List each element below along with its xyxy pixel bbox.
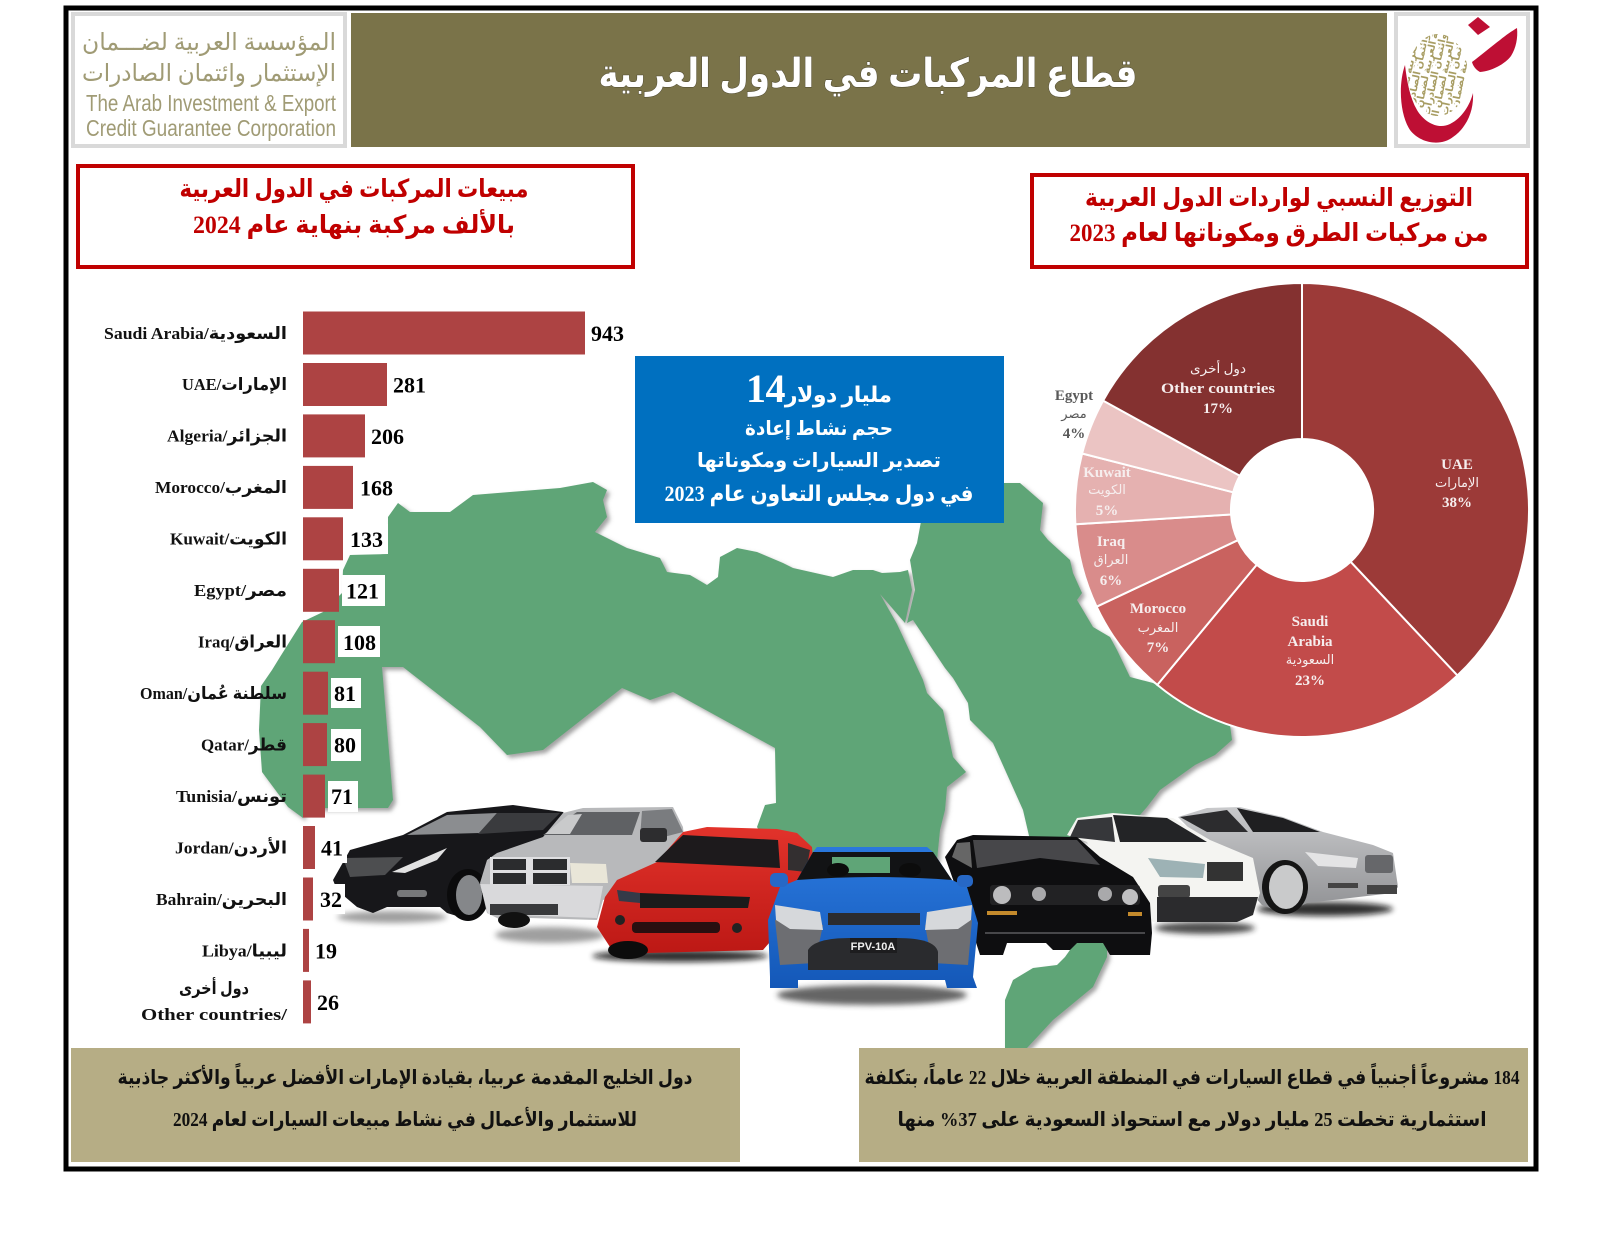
label: Egypt [1055,388,1093,442]
row: Kuwait: Kuwait/الكويت [170,530,287,550]
slice: Morocco 7% [1097,540,1257,685]
row: Morocco [155,466,393,509]
car: white SUV [1067,813,1260,934]
row: Egypt [194,569,385,612]
header: organisation logo panel: الإستثمار وائتمان الصادرات [82,61,336,87]
header: organisation logo panel: Credit Guarantee Corporation [86,115,336,141]
callout: re-export value: في دول مجلس التعاون عام 2023 [664,481,974,507]
row: Qatar: Qatar/قطر [201,736,287,756]
row: Oman: Oman/سلطنة عُمان [140,684,287,703]
label: Kuwait [1083,465,1131,519]
callout: re-export value: حجم نشاط إعادة [745,418,893,440]
label: Other countries: 17% [1203,401,1233,417]
heading: sales chart title box: بالألف مركبة بنهاية عام 2024 [193,209,515,240]
title banner: قطاع المركبات في الدول العربية [598,51,1138,97]
row: Oman: 81 [334,681,356,706]
label: Egypt: مصر [1060,406,1087,422]
row: Algeria [167,414,404,457]
row: Other countries: Other countries/ [141,1005,287,1024]
car: blue performance saloon: FPV-10A [851,941,895,953]
car: blue performance saloon [768,847,978,1005]
car: silver pickup truck [480,807,686,943]
text panel: Gulf lead: دول الخليج المقدمة عربيا، بقيادة الإمارات الأفضل عربياً والأكثر جاذبية [118,1063,692,1089]
slice: Kuwait 5% [1075,454,1233,524]
title banner [351,13,1387,147]
label: Other countries: دول أخرى [1190,360,1246,377]
header: organisation logo panel [73,14,345,146]
row: Libya: Libya/ليبيا [202,942,287,960]
label: Iraq: العراق [1094,552,1128,568]
label: Saudi Arabia: Saudi [1292,614,1328,630]
label: Iraq: 6% [1100,573,1122,589]
row: Other countries [141,977,339,1024]
row: Kuwait: 133 [350,527,383,552]
slice: Other countries 17% [1103,283,1302,476]
row: UAE [182,363,426,406]
label: UAE: الإمارات [1435,475,1479,491]
label: Saudi Arabia [1286,614,1334,689]
row: Jordan [175,826,347,869]
row: Qatar: 80 [334,732,356,758]
car: black sedan [333,805,575,923]
label: Saudi Arabia: Arabia [1288,634,1333,650]
label: Morocco [1130,601,1186,656]
donut chart: import shares [1075,283,1529,737]
row: Morocco: Morocco/المغرب [155,478,287,498]
row: Kuwait [170,517,388,560]
label: Egypt: Egypt [1055,388,1093,404]
label: Other countries: Other countries [1161,381,1275,397]
callout: re-export value: مليار دولار14 [746,366,892,411]
label: Iraq [1094,534,1128,589]
car: black muscle car [945,835,1152,955]
slice: Saudi Arabia 23% [1157,562,1457,737]
heading: sales chart title box: مبيعات المركبات في الدول العربية [180,176,528,204]
heading: imports chart title box: من مركبات الطرق ومكوناتها لعام 2023 [1070,220,1488,248]
row: Iraq: 108 [343,630,376,655]
label: Morocco: 7% [1147,640,1169,656]
row: Bahrain: Bahrain/البحرين [156,890,287,910]
bar chart: vehicle sales [104,312,624,1024]
text panel: foreign projects: 184 مشروعاً أجنبياً في قطاع السيارات في المنطقة العربية خلال 22 عاماً، بتكلفة [864,1063,1520,1090]
row: Oman [140,672,361,715]
label: UAE: UAE [1441,457,1473,473]
row: Libya [202,929,337,972]
label: Other countries [1161,360,1275,417]
label: Saudi Arabia: السعودية [1286,652,1334,668]
label: Morocco: Morocco [1130,601,1186,617]
text panel: Gulf lead: للاستثمار والأعمال في نشاط مبيعات السيارات لعام 2024 [173,1106,637,1132]
row: Morocco: 168 [360,476,393,500]
row: Other countries: 26 [317,990,339,1015]
row: Saudi Arabia: 943 [591,321,624,346]
label: Kuwait: 5% [1096,503,1118,519]
label: Morocco: المغرب [1138,620,1178,636]
label: UAE: 38% [1442,495,1472,511]
car: silver sports saloon [1178,807,1398,916]
row: Egypt: Egypt/مصر [194,581,287,601]
row: Jordan: Jordan/الأردن [175,838,287,858]
label: Iraq: Iraq [1097,534,1126,550]
row: Iraq: Iraq/العراق [198,632,287,652]
map of the Arab world [259,482,1232,1048]
row: Saudi Arabia [104,312,624,354]
label: Kuwait: Kuwait [1083,465,1131,481]
row: Tunisia: 71 [331,784,353,809]
car group [333,805,1398,1005]
row: UAE: UAE/الإمارات [182,375,287,394]
row: Other countries: دول أخرى [179,977,249,999]
row: Tunisia: Tunisia/تونس [176,787,287,807]
row: Algeria: 206 [371,424,404,449]
row: Bahrain: 32 [320,887,342,912]
donut labels [1055,360,1479,689]
heading: imports chart title box: التوزيع النسبي لواردات الدول العربية [1085,185,1473,213]
row: Algeria: Algeria/الجزائر [167,426,287,446]
text panel: foreign projects [859,1048,1528,1162]
icon: calligraphic logo [1394,12,1530,148]
header: organisation logo panel: The Arab Investment & Export [86,90,336,116]
slice: Iraq 6% [1075,514,1238,607]
car: red coupe [592,827,815,962]
heading: imports chart title box [1032,175,1527,267]
row: Qatar [201,723,361,766]
row: Libya: 19 [315,938,337,964]
label: Kuwait: الكويت [1088,482,1126,498]
row: UAE: 281 [393,372,426,398]
row: Saudi Arabia: Saudi Arabia/السعودية [104,324,287,344]
row: Tunisia [176,775,358,818]
text panel: Gulf lead [71,1048,740,1162]
label: Saudi Arabia: 23% [1295,673,1325,689]
label: Egypt: 4% [1063,426,1085,442]
text panel: foreign projects: استثمارية تخطت 25 مليار دولار مع استحواذ السعودية على 37% منها [897,1109,1486,1131]
slice: UAE 38% [1302,283,1529,676]
slice: Egypt 4% [1082,401,1240,492]
label: UAE [1435,457,1479,511]
row: Egypt: 121 [346,578,379,604]
row: Jordan: 41 [321,836,343,860]
header: organisation logo panel: المؤسسة العربية لضـــمان [82,30,336,56]
row: Iraq [198,620,380,663]
callout: re-export value [635,356,1004,523]
row: Bahrain [156,878,345,920]
heading: sales chart title box [78,166,633,267]
callout: re-export value: تصدير السيارات ومكوناتها [697,450,941,472]
